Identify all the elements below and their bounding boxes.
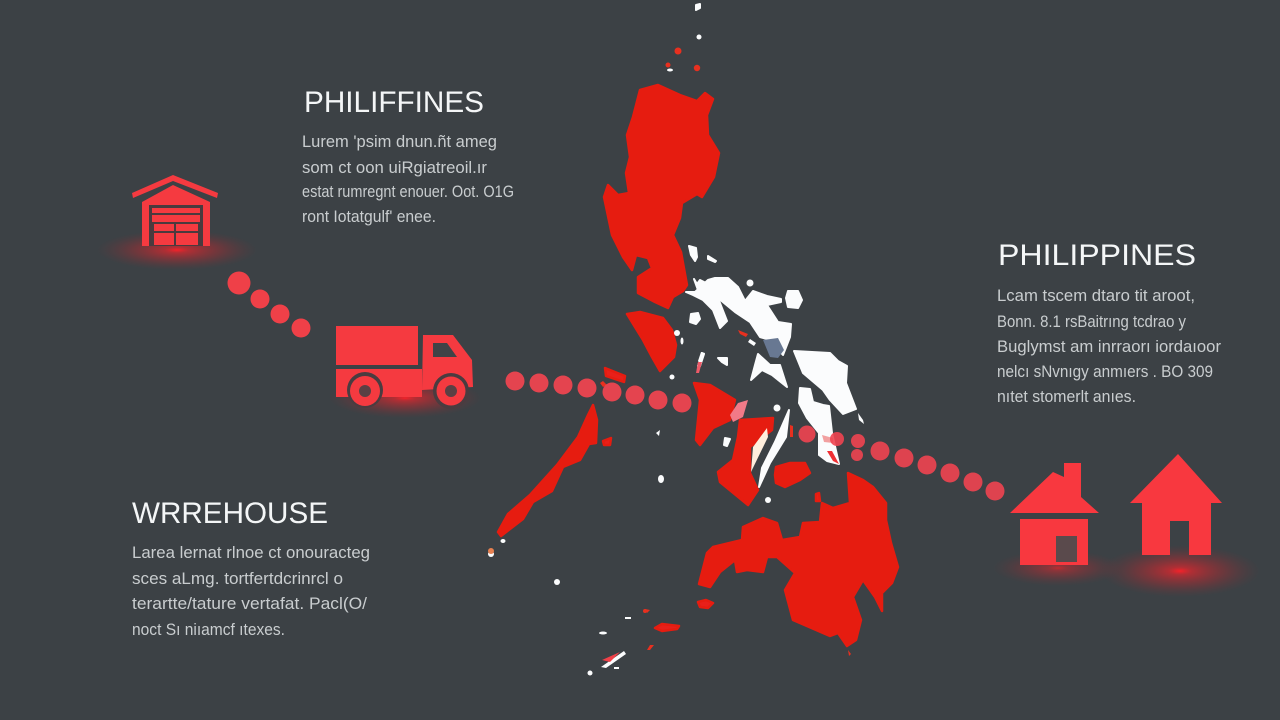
paragraph: ront Iotatgulf' enee. — [302, 207, 436, 226]
map: Philippines — [488, 4, 898, 676]
heading: PHILIPPINES — [998, 239, 1196, 272]
text block: top heading and copy — [302, 86, 514, 226]
pink highlights — [730, 400, 748, 422]
Samar — [794, 351, 856, 414]
small red islands — [605, 368, 625, 382]
fingers — [694, 279, 707, 294]
tiny red specks — [600, 48, 851, 656]
icon: house — [1100, 454, 1260, 597]
Palawan — [498, 405, 597, 536]
gray patch — [763, 338, 784, 358]
paragraph — [302, 132, 514, 226]
paragraph: nıtet stomerlt anıes. — [997, 387, 1136, 406]
Masbate group — [751, 354, 787, 387]
white islands — [686, 4, 856, 487]
route: warehouse to truck dots — [228, 272, 310, 338]
small isles — [718, 358, 727, 365]
Leyte — [799, 388, 839, 464]
paragraph — [132, 543, 370, 639]
paragraph: noct Sı niıamcf ıtexes. — [132, 620, 285, 639]
paragraph: terartte/tature vertafat. Pacl(O/ — [132, 594, 367, 613]
paragraph: Buglymst am inrraorı iordaıoor — [997, 337, 1221, 356]
paragraph: estat rumregnt enouer. Oot. O1G — [302, 182, 514, 201]
icon: warehouse — [97, 175, 257, 270]
Mindanao — [699, 473, 898, 646]
text block: right heading and copy — [997, 239, 1221, 406]
cream wedge on Negros — [751, 428, 768, 472]
red islands: Luzon, Mindoro, Palawan, Visayas, Mindanao — [498, 85, 898, 646]
paragraph — [997, 286, 1221, 406]
heading: WRREHOUSE — [132, 497, 328, 530]
paragraph: som ct oon uiRgiatreoil.ır — [302, 158, 487, 177]
Guimaras — [724, 438, 730, 446]
tiny white specks — [488, 34, 864, 676]
Catanduanes — [786, 291, 802, 308]
icon: house with chimney — [993, 463, 1123, 586]
Cebu — [759, 410, 789, 487]
Mindoro — [627, 312, 676, 371]
heading: PHILIFFINES — [304, 86, 484, 119]
Bohol — [775, 463, 810, 487]
Luzon — [604, 85, 719, 308]
Panay — [694, 383, 735, 445]
paragraph: Larea lernat rlnoe ct onouracteg — [132, 543, 370, 562]
Negros — [718, 418, 773, 505]
icon: truck — [329, 326, 481, 418]
paragraph: sces aLmg. tortfertdcrinrcl o — [132, 569, 343, 588]
route: map to houses dots — [798, 426, 1004, 500]
paragraph: nelcı sNvnıgy anmıers . BO 309 — [997, 362, 1213, 381]
paragraph: Lurem 'psim dnun.ñt ameg — [302, 132, 497, 151]
Bicol peninsula — [686, 278, 791, 355]
route: truck to map dots — [506, 372, 692, 412]
text block: warehouse heading and copy — [132, 497, 370, 639]
paragraph: Bonn. 8.1 rsBaitrıng tcdrao y — [997, 312, 1186, 331]
paragraph: Lcam tscem dtaro tit aroot, — [997, 286, 1195, 305]
